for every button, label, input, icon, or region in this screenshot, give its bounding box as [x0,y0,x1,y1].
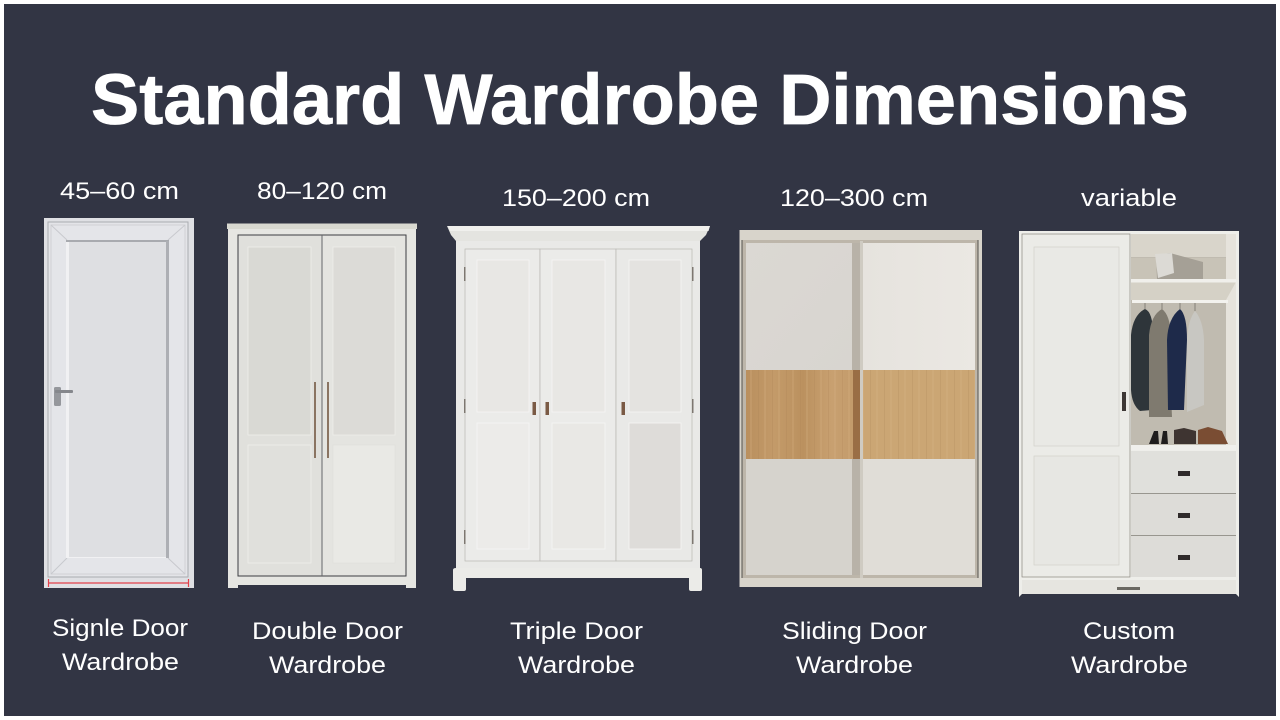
left sliding panel [746,243,860,575]
name label: double door [252,618,403,679]
door with panels [1022,234,1130,577]
name label: triple door: Triple Door [510,618,643,645]
door handles [314,382,329,458]
name label: custom: Wardrobe [1071,652,1188,679]
column: custom wardrobe [1019,185,1239,679]
name label: double door: Double Door [252,618,403,645]
title: Standard Wardrobe Dimensions [91,61,1189,140]
door handle [54,387,73,406]
width label: single door: 45–60 cm [60,178,179,205]
door handles [532,402,625,415]
width label: double door: 80–120 cm [257,178,387,205]
name label: custom: Custom [1083,618,1175,645]
hanging clothes [1131,303,1204,417]
red width marker [48,579,188,587]
illustration: triple door [447,226,710,591]
right sliding panel [863,243,975,575]
column: sliding door wardrobe [740,185,982,679]
name label: triple door: Wardrobe [518,652,635,679]
shoes [1149,427,1228,444]
name label: sliding door: Sliding Door [782,618,927,645]
name label: single door: Signle Door [52,615,188,642]
column: double door wardrobe [227,178,417,679]
name label: custom [1071,618,1188,679]
column: triple door wardrobe [447,185,710,679]
illustration: single door [44,218,194,588]
width label: triple door: 150–200 cm [502,185,650,212]
name label: sliding door: Wardrobe [796,652,913,679]
name label: triple door [510,618,643,679]
name label: single door: Wardrobe [62,649,179,676]
plinth [1022,580,1236,594]
open shelving interior [1131,234,1236,449]
name label: double door: Wardrobe [269,652,386,679]
width label: sliding door: 120–300 cm [780,185,928,212]
name label: sliding door [782,618,927,679]
name label: single door [52,615,188,676]
column: single door wardrobe [44,178,194,676]
width label: custom: variable [1081,185,1177,212]
illustration: sliding door [740,230,982,587]
hinges [464,267,694,544]
drawers [1131,451,1236,577]
illustration: custom wardrobe [1019,231,1239,597]
illustration: double door [227,224,417,588]
